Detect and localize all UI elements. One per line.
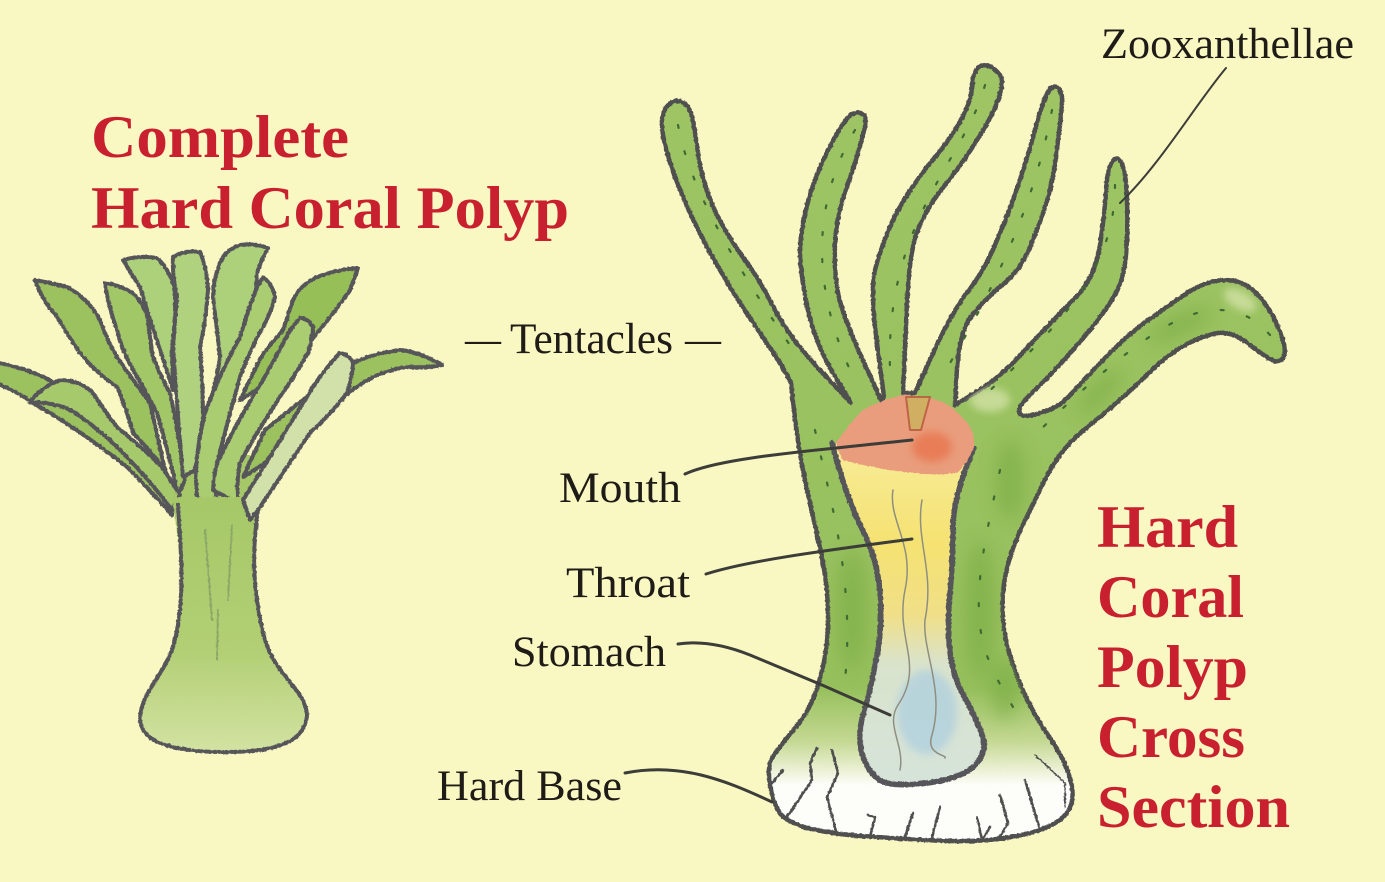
mouth opening [906,397,930,430]
leader: throat [706,539,912,574]
pale front tentacle [243,353,353,520]
label: stomach: Stomach [512,629,666,676]
tall tentacle [207,244,268,413]
leader: stomach [678,643,890,715]
tentacle base fill [172,455,262,510]
mouth red spot [912,432,952,462]
illustration: complete polyp [0,244,442,752]
upper right tentacle [240,268,358,400]
leader: zooxanthellae [1120,68,1226,203]
throat and stomach [832,395,984,785]
heading: complete hard coral polyp [91,104,569,241]
heading: complete hard coral polyp: Hard Coral Polyp [91,175,569,241]
leader lines [625,68,1226,802]
heading: cross section: Cross [1097,704,1245,770]
centre tentacle [173,252,208,477]
far right tentacle [243,350,442,477]
polyp silhouette with tentacles [662,65,1285,841]
heading: complete hard coral polyp: Complete [91,104,349,170]
zooxanthellae dots [678,85,1270,720]
heading: cross section: Polyp [1097,634,1248,700]
label: zooxanthellae: Zooxanthellae [1101,21,1354,68]
pale washes [970,283,1260,412]
heading: cross section: Section [1097,774,1290,840]
oral disc [836,395,974,474]
septa of the hard base [772,748,1040,840]
lower left tentacle [30,380,180,510]
label: mouth: Mouth [559,465,681,512]
illustration: cross-section polyp [662,65,1285,841]
stem outline [140,505,307,752]
tentacle [196,277,275,510]
tentacle [105,283,185,495]
heading: cross section: Coral [1097,564,1244,630]
mesenteries [892,490,945,770]
leader: mouth [685,440,912,474]
label: tentacles: — [464,316,502,363]
stem fill [140,497,307,752]
left tentacle [35,280,165,470]
thin base crease [1035,755,1065,807]
tentacle [213,318,313,503]
heading: cross section: Hard [1097,494,1238,560]
gut outline [832,443,984,785]
label: hard base: Hard Base [437,763,622,810]
heading: cross section [1097,494,1290,840]
gut fill [832,443,984,785]
label: throat: Throat [566,560,690,607]
stomach blue tint [897,670,957,754]
label: tentacles: Tentacles [510,316,673,363]
watercolour washes clipped to the polyp [838,283,1260,720]
stem folds [205,525,232,660]
back tentacle [123,257,175,390]
darker green washes [838,302,1215,720]
leader: hard base [625,770,772,802]
far left tentacle [0,362,175,515]
label: tentacles: — [684,316,722,363]
